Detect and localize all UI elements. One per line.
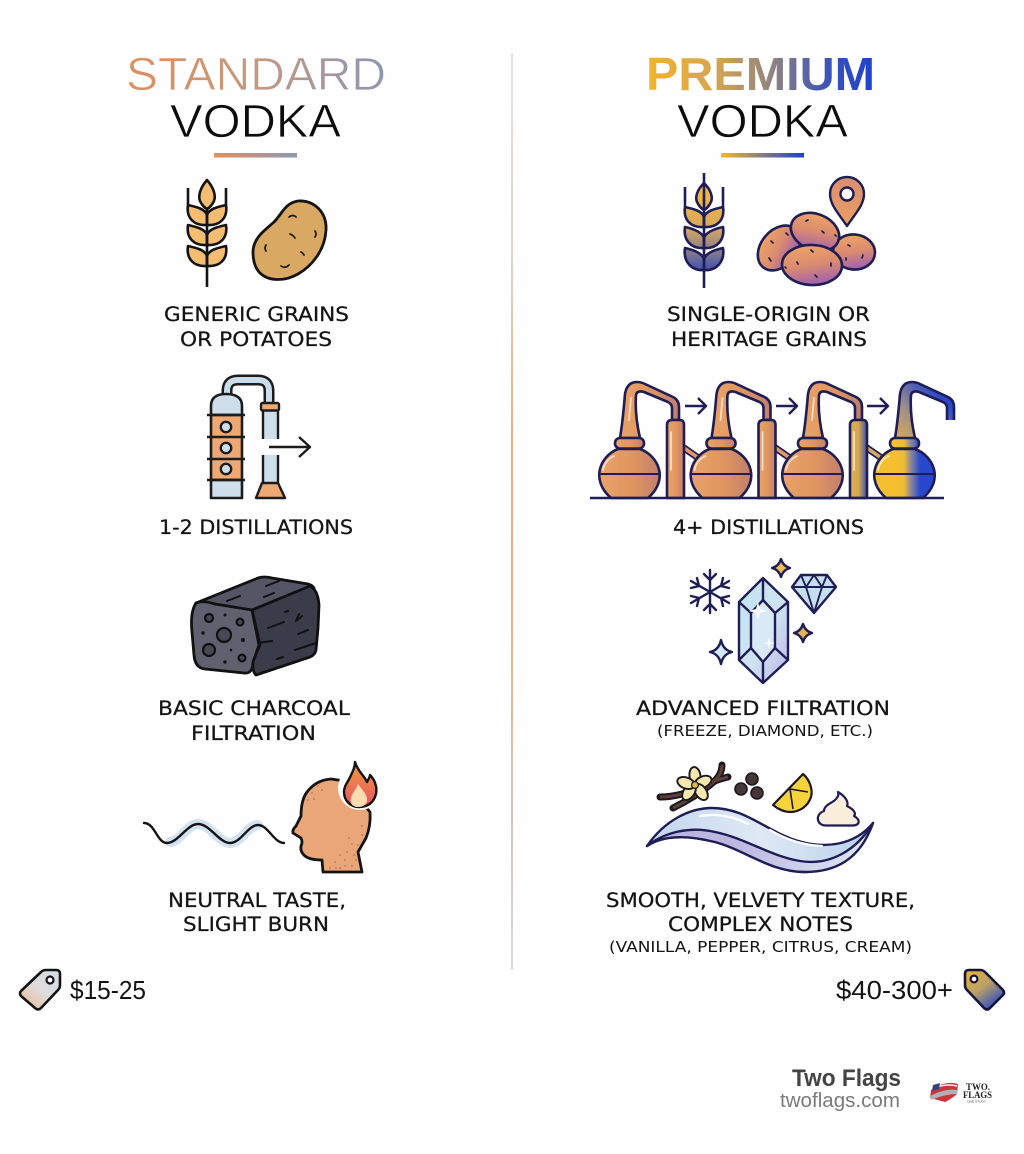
heading: premium vodka: [646, 48, 875, 158]
icon: price tag premium: [965, 970, 1004, 1010]
still 3: [782, 382, 880, 498]
icon: premium potatoes: [749, 206, 876, 286]
logo: two flags: [930, 1083, 992, 1104]
still 2: [691, 382, 788, 498]
icon: diamond: [792, 575, 836, 613]
text: single-origin or heritage grains: SINGLE-ORIGIN OR: [667, 303, 870, 326]
text: smooth velvety texture, complex notes: [606, 889, 915, 956]
icon: snowflake: [691, 570, 729, 613]
text: smooth velvety texture, complex notes: COMPLEX NOTES: [668, 913, 853, 936]
text: premium price: $40-300+: [836, 975, 953, 1005]
icon: crystal: [739, 578, 788, 683]
panel: premium vodka: [590, 48, 1004, 1010]
icon: smooth wave: [647, 808, 873, 872]
text: single-origin or heritage grains: HERITAGE GRAINS: [671, 328, 867, 351]
still 1: [599, 382, 697, 498]
text: neutral taste, slight burn: [168, 889, 346, 936]
icon: neutral taste wave: [144, 823, 284, 843]
icon: head with burn: [293, 762, 382, 872]
text: generic grains or potatoes: [164, 303, 349, 351]
icon: charcoal block: [192, 577, 319, 675]
icon: potato: [253, 201, 326, 280]
text: smooth velvety texture, complex notes: SMOOTH, VELVETY TEXTURE,: [606, 889, 915, 912]
text: advanced filtration: [636, 697, 890, 740]
text: single-origin or heritage grains: [667, 303, 870, 351]
heading: premium vodka: VODKA: [677, 95, 848, 147]
text: 4+ distillations: 4+ DISTILLATIONS: [673, 516, 864, 539]
center divider: [511, 53, 513, 970]
icon: four pot stills: [590, 382, 954, 498]
icon: location pin: [830, 177, 864, 226]
still baseline: [590, 497, 944, 499]
icon: vanilla: [660, 765, 728, 808]
logo: two flags: TWO.: [966, 1083, 990, 1093]
icon: price tag standard: [20, 970, 60, 1010]
footer: two flags branding: [780, 1065, 992, 1112]
heading: standard vodka: [126, 48, 386, 158]
text: basic charcoal filtration: BASIC CHARCOAL: [158, 697, 350, 720]
text: standard price: $15-25: [70, 975, 146, 1005]
panel: standard vodka: [20, 48, 386, 1010]
icon: wheat: [188, 180, 226, 287]
icon: sparkles: [710, 559, 812, 664]
logo: two flags: ONE STUDY: [967, 1100, 986, 1104]
still 4: [874, 382, 954, 498]
heading: standard vodka: STANDARD: [126, 48, 386, 100]
icon: peppercorns: [735, 773, 763, 799]
icon: column still: [207, 380, 310, 498]
text: generic grains or potatoes: OR POTATOES: [180, 328, 332, 351]
flow arrows: [685, 398, 888, 414]
heading: premium vodka: PREMIUM: [646, 48, 875, 100]
text: neutral taste, slight burn: SLIGHT BURN: [183, 913, 329, 936]
text: generic grains or potatoes: GENERIC GRAINS: [164, 303, 349, 326]
heading: standard vodka: VODKA: [170, 95, 341, 147]
logo: two flags: FLAGS: [963, 1091, 992, 1101]
icon: premium wheat: [685, 173, 723, 288]
footer url: twoflags.com: [780, 1090, 900, 1112]
text: 1-2 distillations: 1-2 DISTILLATIONS: [159, 516, 353, 539]
text: neutral taste, slight burn: NEUTRAL TASTE,: [168, 889, 346, 912]
text: smooth velvety texture, complex notes: (VANILLA, PEPPER, CITRUS, CREAM): [609, 938, 912, 956]
text: advanced filtration: ADVANCED FILTRATION: [636, 697, 890, 720]
text: advanced filtration: (FREEZE, DIAMOND, ETC.): [657, 722, 873, 740]
text: basic charcoal filtration: [158, 697, 350, 745]
footer name: Two Flags: [792, 1065, 901, 1092]
icon: cream: [818, 792, 859, 826]
icon: lemon wedge: [773, 774, 812, 812]
text: basic charcoal filtration: FILTRATION: [191, 722, 316, 745]
